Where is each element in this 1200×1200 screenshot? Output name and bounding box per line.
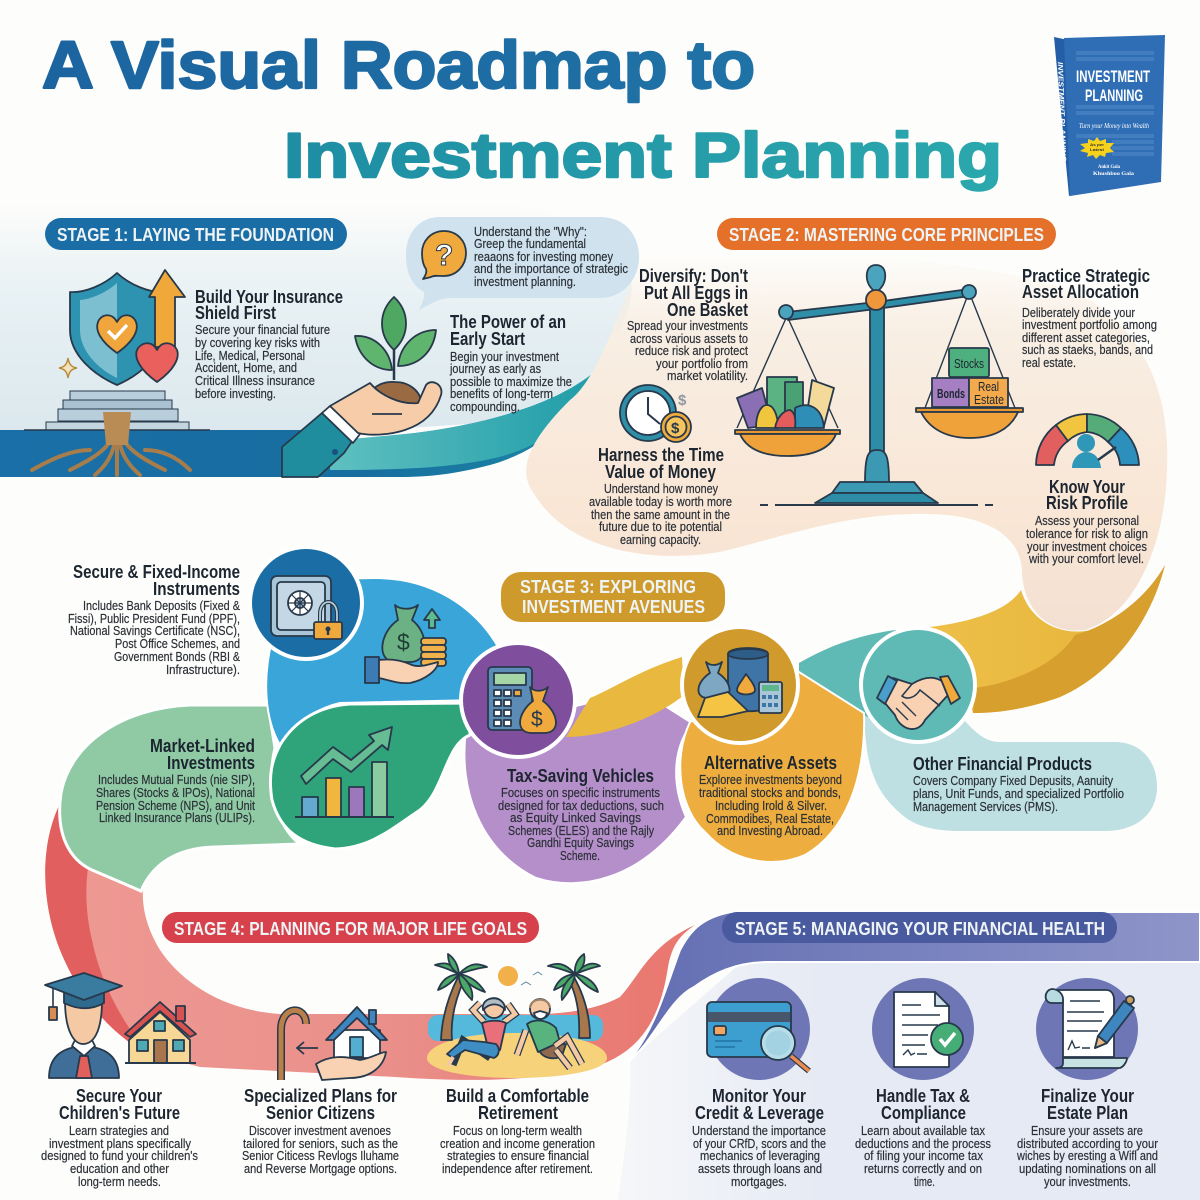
panel: tax-saving blob <box>464 690 692 883</box>
text: finalize your estate plan: Ensure your assets are <box>1031 1123 1143 1138</box>
text: build your insurance shield: Secure your financial future <box>195 322 330 337</box>
text: market-linked investments: Includes Mutual Funds (nie SIP), <box>98 772 255 787</box>
text: secure your children's future: long-term needs. <box>78 1174 161 1189</box>
panel: market-linked dark green area <box>270 703 470 849</box>
text: specialized plans for senior citizens: Senior Citizens <box>266 1103 375 1123</box>
panel: stage 1 background <box>0 205 632 435</box>
title: Investment Planning <box>284 121 1002 191</box>
text: alternative assets: Alternative Assets <box>704 753 837 773</box>
icon: money bag in hand: $ <box>397 629 410 655</box>
book cover <box>1054 35 1165 196</box>
text: tax-saving vehicles: Tax-Saving Vehicles <box>507 766 654 786</box>
text: alternative assets: Exploree investments beyond <box>699 772 842 787</box>
text: practice strategic asset allocation: such as staeks, bands, and <box>1022 342 1153 357</box>
text: know your risk profile: with your comfort level. <box>1028 551 1144 566</box>
text: tax-saving vehicles: Focuses on specific instruments <box>501 785 660 800</box>
text: diversify <box>627 266 748 383</box>
text: tax-saving vehicles: Scheme. <box>560 848 600 863</box>
text: build your insurance shield: Shield First <box>195 303 276 323</box>
text: the power of an early start: benefits of long-term <box>450 386 553 401</box>
icon: estate scroll and pen <box>1036 978 1138 1080</box>
book cover: As per <box>1090 142 1104 147</box>
text: handle tax and compliance: Compliance <box>881 1103 966 1123</box>
text: market-linked investments: Market-Linked <box>150 736 255 756</box>
text: tax-saving vehicles <box>498 766 664 863</box>
text: monitor your credit and leverage: Credit & Leverage <box>695 1103 824 1123</box>
text: market-linked investments <box>96 736 255 825</box>
text: secure and fixed-income instruments: Secure & Fixed-Income <box>73 562 240 582</box>
text: know your risk profile: Know Your <box>1049 477 1125 497</box>
sub-icon: right basket blocks <box>932 348 1008 407</box>
book cover: INVESTMENT PLANNING <box>1056 62 1067 163</box>
text: understand the why: Understand the "Why": <box>474 224 587 239</box>
text: diversify: market volatility. <box>667 368 748 383</box>
text: secure your children's future: Learn strategies and <box>69 1123 169 1138</box>
text: the power of an early start: compounding. <box>450 399 520 414</box>
title <box>42 28 1002 191</box>
ribbon: gold stage 3 connector <box>890 565 1165 713</box>
text: understand the why: investment planning. <box>474 274 576 289</box>
text: practice strategic asset allocation: different asset categories, <box>1022 330 1150 345</box>
text: the power of an early start: possible to maximize the <box>450 374 572 389</box>
icon: clock and coin: $ <box>671 420 680 437</box>
sub-icon: man <box>517 999 582 1068</box>
text: know your risk profile: your investment choices <box>1027 539 1147 554</box>
sub-icon: left basket contents <box>737 377 834 428</box>
heading: stage 3 pill <box>501 572 725 622</box>
text: finalize your estate plan <box>1016 1086 1159 1189</box>
text: practice strategic asset allocation: Deliberately divide your <box>1022 305 1136 320</box>
text: market-linked investments: Pension Scheme (NPS), and Unit <box>96 798 255 813</box>
text: secure your children's future: Secure Your <box>76 1086 162 1106</box>
book cover: PLANNING <box>1085 86 1143 105</box>
panel: stage 2 blob <box>526 253 1167 631</box>
book cover: Ankit Gala <box>1098 164 1120 170</box>
text: secure your children's future: designed to fund your children's <box>41 1148 198 1163</box>
text: specialized plans for senior citizens <box>242 1086 399 1176</box>
text: finalize your estate plan: Estate Plan <box>1047 1103 1128 1123</box>
text: finalize your estate plan: wiches by eresting a Wifl and <box>1016 1148 1158 1163</box>
icon: alternative assets circle <box>682 627 798 743</box>
text: monitor your credit and leverage: mortgages. <box>731 1174 787 1189</box>
text: finalize your estate plan: your investments. <box>1044 1174 1131 1189</box>
text: market-linked investments: Linked Insurance Plans (ULIPs). <box>99 810 255 825</box>
text: the power of an early start: Early Start <box>450 329 525 349</box>
icon: calculator circle: $ <box>531 708 543 731</box>
text: market-linked investments: Shares (Stocks & IPOs), National <box>96 785 255 800</box>
text: specialized plans for senior citizens: Specialized Plans for <box>244 1086 397 1106</box>
panel: stage 5 background <box>618 961 1200 1200</box>
sub-icon: woman <box>447 998 515 1066</box>
text: other financial products: plans, Unit Funds, and specialized Portfolio <box>913 786 1124 801</box>
text: secure your children's future: Children's Future <box>59 1103 180 1123</box>
text: monitor your credit and leverage <box>692 1086 826 1189</box>
ribbon: red stage 4 path <box>45 800 695 1080</box>
text: other financial products: Management Services (PMS). <box>913 799 1058 814</box>
heading: stage 3 pill: INVESTMENT AVENUES <box>522 596 705 617</box>
text: secure and fixed-income instruments: National Savings Certificate (NSC), <box>70 623 240 638</box>
sub-icon: right basket blocks: Stocks <box>954 357 984 371</box>
heading: stage 4 pill <box>162 912 539 943</box>
text: practice strategic asset allocation <box>1022 266 1157 370</box>
heading: stage 1 pill: STAGE 1: LAYING THE FOUNDATION <box>57 224 334 245</box>
text: alternative assets: Including Irold & Silver. <box>715 798 827 813</box>
text: practice strategic asset allocation: Practice Strategic <box>1022 266 1150 286</box>
book cover: Turn your Money into Wealth <box>1079 122 1149 130</box>
sub-icon: right basket blocks: Estate <box>974 393 1004 407</box>
text: know your risk profile: Assess your personal <box>1035 513 1139 528</box>
icon: risk gauge <box>1036 414 1139 468</box>
text: harness the time value of money: Understand how money <box>604 481 719 496</box>
text: tax-saving vehicles: designed for tax deductions, such <box>498 798 664 813</box>
text: practice strategic asset allocation: investment portfolio among <box>1022 317 1157 332</box>
text: harness the time value of money: Value of Money <box>605 462 716 482</box>
text: diversify: across various assets to <box>630 331 748 346</box>
text: secure and fixed-income instruments: Instruments <box>153 579 240 599</box>
text: monitor your credit and leverage: assets through loans and <box>698 1161 822 1176</box>
text: alternative assets <box>699 753 842 838</box>
text: other financial products: Other Financial Products <box>913 754 1092 774</box>
icon: growth chart <box>295 727 394 817</box>
text: alternative assets: and Investing Abroad. <box>717 823 823 838</box>
text: harness the time value of money: earning capacity. <box>620 532 701 547</box>
text: secure and fixed-income instruments: Includes Bank Deposits (Fixed & <box>83 598 240 613</box>
text: other financial products <box>913 754 1124 814</box>
text: understand the why: reaaons for investing money <box>474 249 614 264</box>
icon: handshake circle <box>861 628 975 742</box>
text: handle tax and compliance: of filing your income tax <box>864 1148 984 1163</box>
text: market-linked investments: Investments <box>167 753 255 773</box>
text: build a comfortable retirement: Focus on long-term wealth <box>453 1123 582 1138</box>
icon: graduate and house <box>45 973 196 1078</box>
icon: retirement beach scene <box>427 954 607 1078</box>
heading: stage 1 pill <box>45 218 347 250</box>
panel: secure and fixed-income blob <box>266 578 500 745</box>
icon: clock and coin <box>620 385 691 442</box>
text: know your risk profile: tolerance for risk to align <box>1026 526 1148 541</box>
text: practice strategic asset allocation: real estate. <box>1022 355 1076 370</box>
text: tax-saving vehicles: as Equity Linked Savings <box>510 810 641 825</box>
panel: teal connector <box>799 630 960 730</box>
text: secure your children's future: investment plans specifically <box>49 1136 192 1151</box>
icon: insurance shield on foundation with roots <box>24 270 210 475</box>
text: build your insurance shield: by covering key risks with <box>195 335 320 350</box>
text: diversify: your portfolio from <box>656 356 748 371</box>
text: build a comfortable retirement <box>440 1086 595 1176</box>
text: diversify: reduce risk and protect <box>635 343 748 358</box>
icon: safe circle <box>250 547 362 659</box>
text: monitor your credit and leverage: mechanics of leveraging <box>700 1148 820 1163</box>
text: understand the why <box>474 224 629 289</box>
heading: stage 3 pill: STAGE 3: EXPLORING <box>520 576 696 597</box>
sub-icon: right basket blocks: Bonds <box>937 387 965 401</box>
heading: stage 2 pill <box>717 218 1056 250</box>
text: diversify: Spread your investments <box>627 318 748 333</box>
text: specialized plans for senior citizens: tailored for seniors, such as the <box>243 1136 398 1151</box>
text: handle tax and compliance: Handle Tax & <box>876 1086 970 1106</box>
text: diversify: One Basket <box>667 300 748 320</box>
text: harness the time value of money: future due to ite potential <box>599 519 722 534</box>
icon: calculator circle <box>461 643 575 757</box>
text: build a comfortable retirement: Build a Comfortable <box>446 1086 589 1106</box>
panel: alternative assets blob <box>680 672 864 862</box>
text: tax-saving vehicles: Schemes (ELES) and the Rajly <box>508 823 654 838</box>
text: finalize your estate plan: updating nominations on all <box>1019 1161 1156 1176</box>
heading: stage 5 pill: STAGE 5: MANAGING YOUR FINANCIAL HEALTH <box>735 918 1105 939</box>
heading: stage 5 pill <box>722 912 1117 943</box>
text: build your insurance shield <box>195 287 343 401</box>
text: handle tax and compliance: time. <box>914 1174 935 1189</box>
icon: hand holding sapling <box>282 297 441 477</box>
ribbon: purple stage 5 header band <box>628 912 1200 1062</box>
icon: question mark: ? <box>435 239 453 272</box>
text: the power of an early start <box>449 312 572 414</box>
text: harness the time value of money: Harness the Time <box>598 445 724 465</box>
text: the power of an early start: journey as early as <box>449 361 541 376</box>
icon: speech bubble <box>406 217 639 310</box>
text: harness the time value of money: available today is worth more <box>589 494 732 509</box>
sub-icon: right basket blocks: Real <box>978 380 999 394</box>
text: other financial products: Covers Company Fixed Depusits, Aanuity <box>913 773 1114 788</box>
text: build a comfortable retirement: independence after retirement. <box>442 1161 593 1176</box>
panel: other financial products blob <box>864 712 1157 831</box>
book cover: Latest <box>1090 147 1105 152</box>
text: secure and fixed-income instruments: Government Bonds (RBI & <box>114 649 240 664</box>
icon: cane, arrow, house in hand <box>281 1007 387 1080</box>
icon: question mark <box>422 231 466 279</box>
text: secure and fixed-income instruments: Infrastructure). <box>166 662 240 677</box>
text: build your insurance shield: before investing. <box>195 386 276 401</box>
panel: market-linked blob <box>60 705 300 891</box>
text: alternative assets: Commodibes, Real Estate, <box>706 811 834 826</box>
text: diversify: Put All Eggs in <box>644 283 748 303</box>
text: know your risk profile: Risk Profile <box>1046 493 1128 513</box>
text: secure and fixed-income instruments: Post Office Schemes, and <box>115 636 240 651</box>
text: handle tax and compliance: Learn about available tax <box>861 1123 986 1138</box>
title: A Visual Roadmap to <box>42 28 755 103</box>
text: finalize your estate plan: distributed according to your <box>1017 1136 1159 1151</box>
text: harness the time value of money <box>589 445 732 547</box>
text: handle tax and compliance: returns correctly and on <box>864 1161 982 1176</box>
text: tax-saving vehicles: Gandhi Equity Savings <box>527 835 634 850</box>
text: secure your children's future: education and other <box>70 1161 170 1176</box>
icon: clock and coin: $ <box>678 392 687 409</box>
heading: stage 2 pill: STAGE 2: MASTERING CORE PRINCIPLES <box>729 224 1044 245</box>
text: build a comfortable retirement: strategies to ensure financial <box>447 1148 589 1163</box>
panel: stage 1 ribbon <box>0 367 600 477</box>
panel: gold strip <box>566 657 684 737</box>
text: secure and fixed-income instruments <box>68 562 240 677</box>
text: the power of an early start: Begin your investment <box>450 349 559 364</box>
text: harness the time value of money: then the same amount in the <box>591 507 730 522</box>
text: secure your children's future <box>41 1086 198 1189</box>
text: understand the why: and the importance of strategic <box>474 261 629 276</box>
text: build your insurance shield: Build Your Insurance <box>195 287 343 307</box>
book cover: Khushboo Gala <box>1093 171 1134 177</box>
icon: credit card and magnifier <box>707 978 810 1080</box>
text: diversify: Diversify: Don't <box>639 266 748 286</box>
text: monitor your credit and leverage: Monitor Your <box>712 1086 806 1106</box>
text: secure and fixed-income instruments: Fissi), Public President Fund (PPF), <box>68 611 240 626</box>
text: handle tax and compliance <box>855 1086 991 1189</box>
heading: stage 4 pill: STAGE 4: PLANNING FOR MAJOR LIFE GOALS <box>174 918 527 939</box>
text: build your insurance shield: Life, Medical, Personal <box>195 348 305 363</box>
text: know your risk profile <box>1026 477 1148 566</box>
icon: balance scale <box>735 265 1023 505</box>
icon: money bag in hand <box>365 605 446 683</box>
text: build a comfortable retirement: Retirement <box>478 1103 558 1123</box>
text: specialized plans for senior citizens: Senior Citicess Revlogs Iluhame <box>242 1148 399 1163</box>
text: build a comfortable retirement: creation and income generation <box>440 1136 595 1151</box>
text: alternative assets: traditional stocks and bonds, <box>699 785 841 800</box>
book cover: INVESTMENT <box>1076 67 1150 86</box>
text: monitor your credit and leverage: Understand the importance <box>692 1123 826 1138</box>
text: finalize your estate plan: Finalize Your <box>1041 1086 1134 1106</box>
text: specialized plans for senior citizens: and Reverse Mortgage options. <box>244 1161 397 1176</box>
text: build your insurance shield: Accident, Home, and <box>195 360 297 375</box>
text: practice strategic asset allocation: Asset Allocation <box>1022 282 1139 302</box>
text: handle tax and compliance: deductions and the process <box>855 1136 991 1151</box>
text: understand the why: Greep the fundamental <box>474 236 586 251</box>
text: the power of an early start: The Power of an <box>450 312 566 332</box>
text: monitor your credit and leverage: of your CRfD, scors and the <box>693 1136 826 1151</box>
icon: document with check <box>872 978 974 1080</box>
text: build your insurance shield: Critical Illness insurance <box>195 373 315 388</box>
text: specialized plans for senior citizens: Discover investment avenoes <box>249 1123 391 1138</box>
